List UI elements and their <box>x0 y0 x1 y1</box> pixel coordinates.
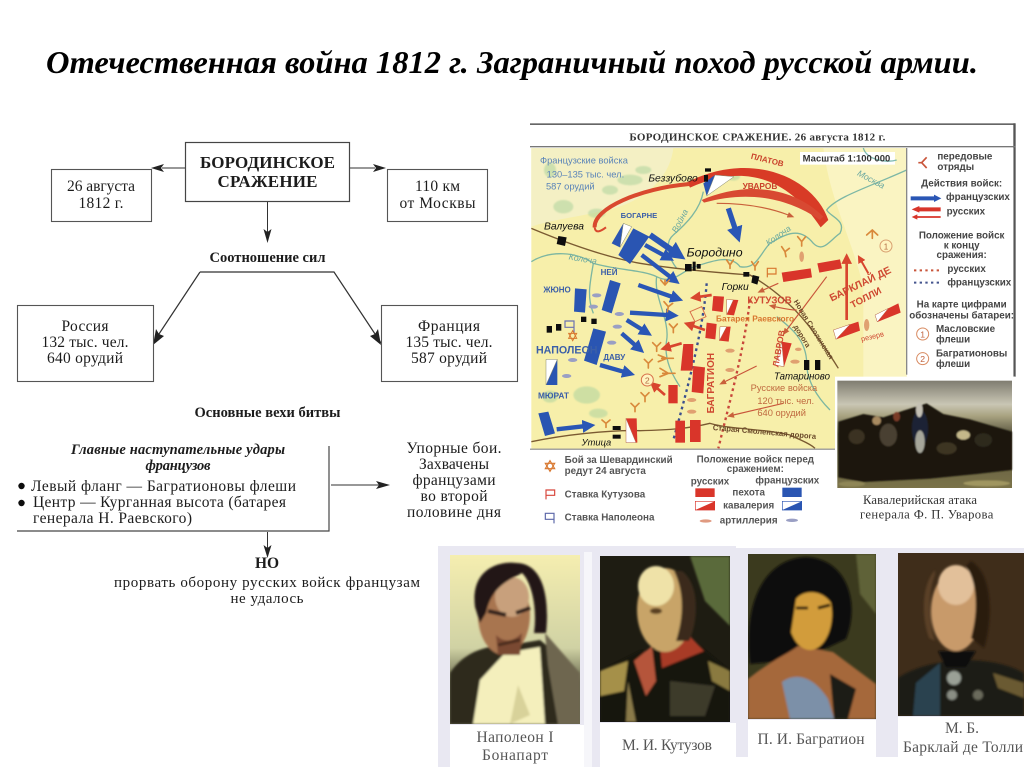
French infantry and cavalry blocks <box>538 175 734 436</box>
right legend: Действия войск: <box>921 179 1002 190</box>
bottom legend: сражением: <box>727 464 784 475</box>
map labels: 1 <box>884 242 889 251</box>
bottom legend: французских <box>755 476 820 487</box>
bottom legend: Ставка Кутузова <box>565 490 646 501</box>
cavalry attack painting <box>835 377 1015 530</box>
main box: Borodino battle <box>186 142 350 202</box>
artillery marks <box>562 293 624 378</box>
right legend: сражения: <box>937 250 987 261</box>
arrow: to outcome <box>331 481 390 489</box>
map labels: 130–135 тыс. чел. <box>547 169 624 179</box>
markers on map: HQ flags, redoubt, batteries <box>565 240 892 386</box>
portrait: Bagration <box>748 554 876 719</box>
portrait: Kutuzov <box>600 556 730 722</box>
map labels: Старая Смоленская дорога <box>712 423 817 441</box>
right legend: На карте цифрами <box>917 300 1007 311</box>
bottom legend: русских <box>691 476 730 487</box>
Russian infantry and cavalry blocks <box>626 259 901 443</box>
block: main French attacks: Главные наступательные удары <box>70 442 285 458</box>
cavalry attack painting: Кавалерийская атака <box>863 493 977 507</box>
portrait captions <box>476 720 1023 764</box>
French attack arrows <box>557 208 735 429</box>
Russian attacks: Platov and Uvarov: УВАРОВ <box>743 181 777 191</box>
text: outcome: французами <box>412 472 496 489</box>
block: main French attacks: Центр — Курганная высота (батарея <box>33 494 286 511</box>
text: conclusion: прорвать оборону русских войск французам <box>114 575 420 591</box>
map labels: Масштаб 1:100 000 <box>803 153 890 164</box>
text: conclusion <box>114 555 420 607</box>
map labels: НАПОЛЕОН <box>536 344 598 356</box>
bottom legend: Положение войск перед <box>697 454 815 465</box>
map labels: Французские войска <box>540 155 629 165</box>
bottom legend: артиллерия <box>720 515 778 526</box>
Russian attacks: Platov and Uvarov <box>595 152 828 231</box>
portrait captions: Барклай де Толли <box>903 739 1023 756</box>
Russian counter arrows and forward detachments <box>725 277 827 415</box>
panel: portraits <box>438 546 1024 767</box>
map labels: Колоча <box>568 251 598 266</box>
map labels: Новая Смоленская <box>792 298 836 361</box>
portrait captions: Бонапарт <box>482 747 548 764</box>
title: Отечественная война 1812 г. Заграничный поход русской армии. <box>46 45 978 80</box>
arrow: to date <box>151 164 185 172</box>
right legend: французских <box>947 277 1012 288</box>
main box: Borodino battle: БОРОДИНСКОЕ <box>200 153 335 172</box>
French position dotted line and Russian dotted line <box>673 283 750 448</box>
right legend: обозначены батареи: <box>909 310 1014 321</box>
right legend <box>906 148 1014 378</box>
box: date: 1812 г. <box>78 195 124 212</box>
map labels: БОГАРНЕ <box>621 211 657 220</box>
portrait captions: Наполеон I <box>476 729 554 746</box>
box: Russia <box>18 306 154 382</box>
text: outcome: Упорные бои. <box>406 440 502 457</box>
portrait captions: П. И. Багратион <box>758 731 864 748</box>
bottom legend: пехота <box>732 488 765 499</box>
box: Russia: 132 тыс. чел. <box>42 334 128 351</box>
map labels: Колоча <box>764 223 793 248</box>
right legend: Масловские <box>936 324 996 335</box>
right legend: Багратионовы <box>936 348 1007 359</box>
bottom legend: Ставка Наполеона <box>565 513 655 524</box>
map labels: ТОЛЛИ <box>849 286 884 311</box>
text: conclusion: не удалось <box>230 591 304 607</box>
roads <box>531 228 838 448</box>
box: France: 587 орудий <box>411 350 487 367</box>
map frame and title: БОРОДИНСКОЕ СРАЖЕНИЕ. 26 августа 1812 г. <box>629 132 886 144</box>
box: France <box>382 306 518 382</box>
map labels: Батарея Раевского <box>716 313 794 323</box>
portrait: Barclay de Tolly <box>898 553 1024 716</box>
map labels: МЮРАТ <box>538 390 569 400</box>
box: Russia: 640 орудий <box>47 350 123 367</box>
panel: Borodino schema <box>17 142 518 607</box>
cavalry attack painting: генерала Ф. П. Уварова <box>860 508 994 522</box>
text: outcome <box>406 440 502 521</box>
portrait captions: М. И. Кутузов <box>622 737 712 754</box>
map labels: НЕЙ <box>601 268 618 277</box>
box: Russia: Россия <box>62 318 108 335</box>
right legend: флеши <box>936 335 970 346</box>
map frame and title <box>530 123 1016 528</box>
text: outcome: во второй <box>420 488 488 505</box>
box: date <box>52 170 152 222</box>
map labels: Москва <box>856 168 887 191</box>
portrait: Napoleon <box>450 555 580 724</box>
map labels: Русские войска <box>751 383 818 393</box>
right legend: французских <box>946 192 1010 203</box>
terrain <box>531 148 907 449</box>
portrait captions: М. Б. <box>945 720 979 737</box>
map labels: ЖЮНО <box>542 286 571 295</box>
box: France: 135 тыс. чел. <box>406 334 492 351</box>
rivers <box>531 148 907 410</box>
bottom legend: кавалерия <box>723 500 774 511</box>
map labels: Утица <box>581 438 611 448</box>
bottom legend <box>530 449 838 529</box>
branching arrows <box>153 272 381 345</box>
right legend: 2 <box>920 354 925 364</box>
block: main French attacks <box>17 442 329 531</box>
right legend: 1 <box>920 329 925 339</box>
map labels <box>536 153 893 448</box>
right legend: отряды <box>937 162 974 173</box>
panel: Borodino map <box>530 123 1016 530</box>
map labels: ЛАВРОВ <box>770 329 787 368</box>
block: main French attacks: французов <box>146 458 211 474</box>
map labels: Война <box>670 207 690 234</box>
text: outcome: половине дня <box>407 504 501 521</box>
map labels: БАГРАТИОН <box>706 353 717 413</box>
box: distance: 110 км <box>415 178 460 195</box>
bottom legend: Бой за Шевардинский <box>565 455 673 466</box>
box: distance: от Москвы <box>400 195 476 212</box>
right legend: русских <box>947 207 986 218</box>
text: outcome: Захвачены <box>419 456 490 473</box>
arrow: to but <box>264 532 272 558</box>
map labels: дорога <box>792 323 813 350</box>
map labels: Горки <box>722 282 749 293</box>
arrow: to distance <box>350 164 386 172</box>
villages <box>547 168 820 439</box>
box: France: Франция <box>418 318 480 335</box>
map labels: резерв <box>860 329 885 344</box>
map labels: Татариново <box>774 371 831 382</box>
map labels: БАРКЛАЙ ДЕ <box>827 263 893 304</box>
right legend: русских <box>947 264 986 275</box>
right legend: Положение войск <box>919 231 1005 242</box>
Russian attacks: Platov and Uvarov: ПЛАТОВ <box>750 152 785 169</box>
block: main French attacks: генерала Н. Раевского) <box>33 510 192 527</box>
block: main French attacks: Левый фланг — Багратионовы флеши <box>31 478 296 495</box>
map labels: 120 тыс. чел. <box>757 396 814 406</box>
right legend: передовые <box>937 151 993 162</box>
right legend: к концу <box>944 241 980 252</box>
map labels: 2 <box>645 375 650 385</box>
bottom legend: редут 24 августа <box>565 466 646 477</box>
map labels: 640 орудий <box>757 408 806 418</box>
text: conclusion: НО <box>255 555 279 572</box>
map labels: ДАВУ <box>603 353 626 362</box>
map labels: Бородино <box>687 246 743 260</box>
portraits background <box>438 546 1024 767</box>
map labels: Валуева <box>544 221 584 232</box>
heading: balance of forces: Соотношение сил <box>210 250 326 266</box>
map labels: КУТУЗОВ <box>747 295 792 306</box>
main box: Borodino battle: СРАЖЕНИЕ <box>218 172 318 191</box>
box: distance <box>388 170 488 222</box>
right legend: флеши <box>936 359 970 370</box>
arrow: to balance of forces <box>264 202 272 243</box>
box: date: 26 августа <box>67 178 135 195</box>
heading: main milestones: Основные вехи битвы <box>194 405 340 421</box>
map labels: Беззубово <box>648 173 698 185</box>
map labels: 587 орудий <box>546 182 595 192</box>
